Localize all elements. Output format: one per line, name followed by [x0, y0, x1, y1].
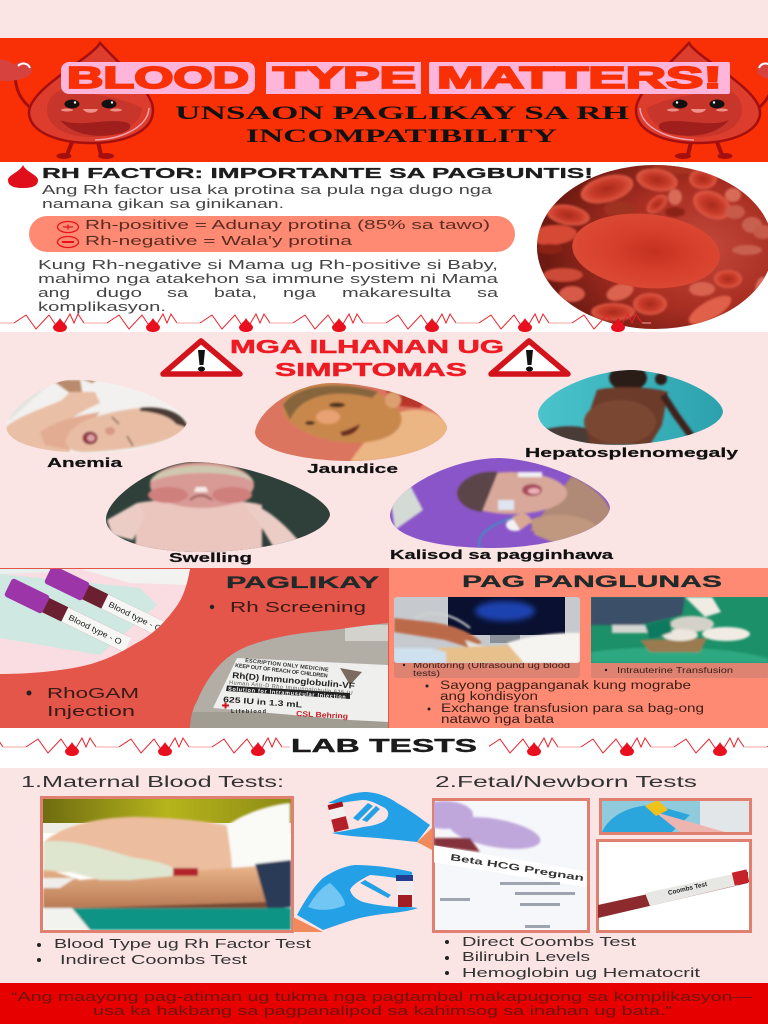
title: [61, 60, 730, 95]
image: RhoGAM vial: KEEP OUT OF REACH OF CHILDREN: [235, 663, 328, 680]
list item: RhoGAM Injection: RhoGAM: [47, 686, 139, 702]
heading: Paglikay: PAGLIKAY: [226, 573, 380, 592]
icon: blood drop: [8, 165, 38, 188]
icon: left blood drop mascot: [0, 43, 153, 159]
image: baby with breathing difficulty: [390, 458, 610, 548]
image: ultrasound: [394, 597, 580, 663]
panel: header banner: [0, 38, 768, 162]
list: fetal tests: [445, 934, 701, 980]
callout: Rh positive and negative: Rh-positive = Adunay protina (85% sa tawo): [85, 217, 490, 232]
list: maternal tests: Blood Type ug Rh Factor Test: [54, 936, 312, 951]
list: treatment steps: Exchange transfusion para sa bag-ong: [441, 703, 704, 715]
caption card: monitoring: tests): [413, 669, 440, 678]
callout: Rh positive and negative: Rh-negative = Wala'y protina: [85, 233, 353, 248]
image: blood type tubes: Blood type - O: [107, 600, 163, 634]
panel: closing quote: [0, 983, 768, 1024]
decoration: heartbeat line: [0, 314, 651, 332]
image: gloved hand with test tube: [600, 800, 750, 834]
text: explanation: Kung Rh-negative si Mama ug Rh-positive si Baby,: [38, 257, 498, 272]
image: blood type tubes: Blood type - O: [67, 613, 123, 647]
label: Anemia: Anemia: [47, 455, 123, 470]
icon: plus: [58, 222, 78, 232]
text: definition: namana gikan sa ginikanan.: [42, 196, 284, 211]
image: intrauterine transfusion: [591, 597, 768, 663]
label: Kalisod sa pagginhawa: Kalisod sa pagginhawa: [390, 547, 614, 562]
panel: closing quote: “Ang maayong pag-atiman ug tukma nga pagtambal makapugong sa komplikasyon—: [11, 990, 753, 1004]
text: definition: [42, 182, 493, 211]
image: RhoGAM vial: CSL Behring: [296, 709, 349, 721]
caption card: monitoring: [394, 660, 580, 678]
list: treatment steps: [426, 680, 704, 726]
text: definition: Ang Rh factor usa ka protina sa pula nga dugo nga: [42, 182, 493, 197]
list: fetal tests: Direct Coombs Test: [462, 934, 637, 949]
list item: RhoGAM Injection: Injection: [47, 704, 135, 720]
image: hepatosplenomegaly child: [538, 370, 723, 445]
label: Jaundice: Jaundice: [307, 461, 398, 476]
image: beta HCG report: Beta HCG Pregnan: [450, 852, 585, 883]
list: maternal tests: Indirect Coombs Test: [60, 952, 248, 967]
panel: treatment: [389, 568, 768, 728]
text: explanation: sa: [167, 285, 189, 300]
decoration: lab tests heartbeat line: [0, 732, 768, 762]
label: Swelling: Swelling: [169, 550, 252, 565]
list item: RhoGAM Injection: [26, 686, 139, 720]
image: Coombs test tube: Coombs Test: [667, 881, 709, 897]
icon: right blood drop mascot: [636, 43, 768, 159]
icon: minus: [58, 236, 78, 248]
subtitle: INCOMPATIBILITY: [246, 126, 557, 147]
list: treatment steps: ang kondisyon: [440, 691, 538, 703]
list: fetal tests: Hemoglobin ug Hematocrit: [462, 965, 701, 980]
image: anemia baby: [6, 380, 188, 453]
image: RhoGAM vial: Lifeblood: [231, 709, 266, 715]
title: BLOOD: [67, 60, 249, 95]
text: explanation: makaresulta: [342, 285, 452, 300]
list: fetal tests: Bilirubin Levels: [462, 949, 591, 964]
image: RhoGAM vial: Solution for Intramuscular Injection: [228, 687, 347, 701]
list: treatment steps: natawo nga bata: [441, 714, 555, 726]
list item: Rh Screening: Rh Screening: [230, 600, 366, 616]
image: beta HCG report: [417, 800, 590, 932]
heading: Rh factor: RH FACTOR: IMPORTANTE SA PAGBUNTIS!: [42, 165, 593, 182]
caption card: intrauterine: Intrauterine Transfusion: [617, 666, 733, 675]
panel: fetal and newborn tests: [417, 774, 750, 980]
label: Hepatosplenomegaly: Hepatosplenomegaly: [525, 445, 739, 460]
heading: maternal tests: 1.Maternal Blood Tests:: [21, 774, 284, 791]
text: explanation: ang: [38, 285, 70, 300]
image: RhoGAM vial: Human Anti-D Rho Immunoglobulin 625 IU: [229, 680, 353, 697]
list item: Rh Screening: [210, 600, 366, 616]
icon: upper gloved hand with tube: [328, 792, 432, 850]
text: explanation: sa: [477, 285, 499, 300]
title: MATTERS!: [437, 60, 722, 95]
text: explanation: dugo: [96, 285, 142, 300]
image: Coombs test tube: [598, 840, 750, 932]
text: explanation: [38, 257, 499, 314]
image: blood type tubes: [0, 565, 195, 676]
icon: right warning: [491, 341, 568, 374]
panel: Rh factor: [0, 160, 768, 335]
image: swollen baby: [106, 462, 330, 552]
image: jaundice baby: [255, 383, 447, 461]
list: maternal tests: [37, 936, 312, 967]
subtitle: [175, 103, 629, 147]
heading: Pag Panglunas: PAG PANGLUNAS: [462, 572, 722, 591]
heading: Lab Tests: LAB TESTS: [291, 736, 477, 756]
image: RhoGAM vial: Rh(D) Immunoglobulin-VF: [232, 670, 355, 691]
caption card: monitoring: Monitoring (Ultrasound ug blood: [413, 661, 570, 670]
heading: symptoms: MGA ILHANAN UG: [230, 337, 504, 357]
heading: symptoms: [230, 337, 504, 380]
panel: prevention: [0, 565, 390, 730]
image: RhoGAM vial: [188, 620, 390, 730]
image: blood draw: [42, 798, 292, 932]
panel: maternal blood tests: [21, 774, 312, 967]
text: explanation: komplikasyon.: [38, 299, 166, 314]
heading: symptoms: SIMPTOMAS: [275, 360, 467, 380]
panel: symptoms: [0, 337, 739, 565]
subtitle: UNSAON PAGLIKAY SA RH: [175, 103, 629, 124]
list: treatment steps: Sayong pagpanganak kung mograbe: [440, 680, 691, 692]
icon: left warning: [163, 341, 240, 374]
image: red blood cells: [528, 160, 768, 335]
title: TYPE: [273, 60, 416, 95]
heading: fetal tests: 2.Fetal/Newborn Tests: [435, 774, 697, 791]
image: RhoGAM vial: ESCRIPTION ONLY MEDICINE: [245, 658, 329, 674]
icon: lower gloved hand with tube: [293, 865, 418, 932]
text: explanation: bata,: [214, 285, 257, 300]
image: RhoGAM vial: 625 IU in 1.3 mL: [223, 695, 302, 710]
panel: closing quote: usa ka hakbang sa pagpanalipod sa kahimsog sa inahan ug bata.”: [93, 1004, 672, 1018]
text: explanation: nga: [283, 285, 317, 300]
text: explanation: mahimo nga atakehon sa immune system ni Mama: [38, 271, 499, 286]
caption card: intrauterine: [591, 660, 768, 678]
callout: Rh positive and negative: [29, 216, 515, 252]
